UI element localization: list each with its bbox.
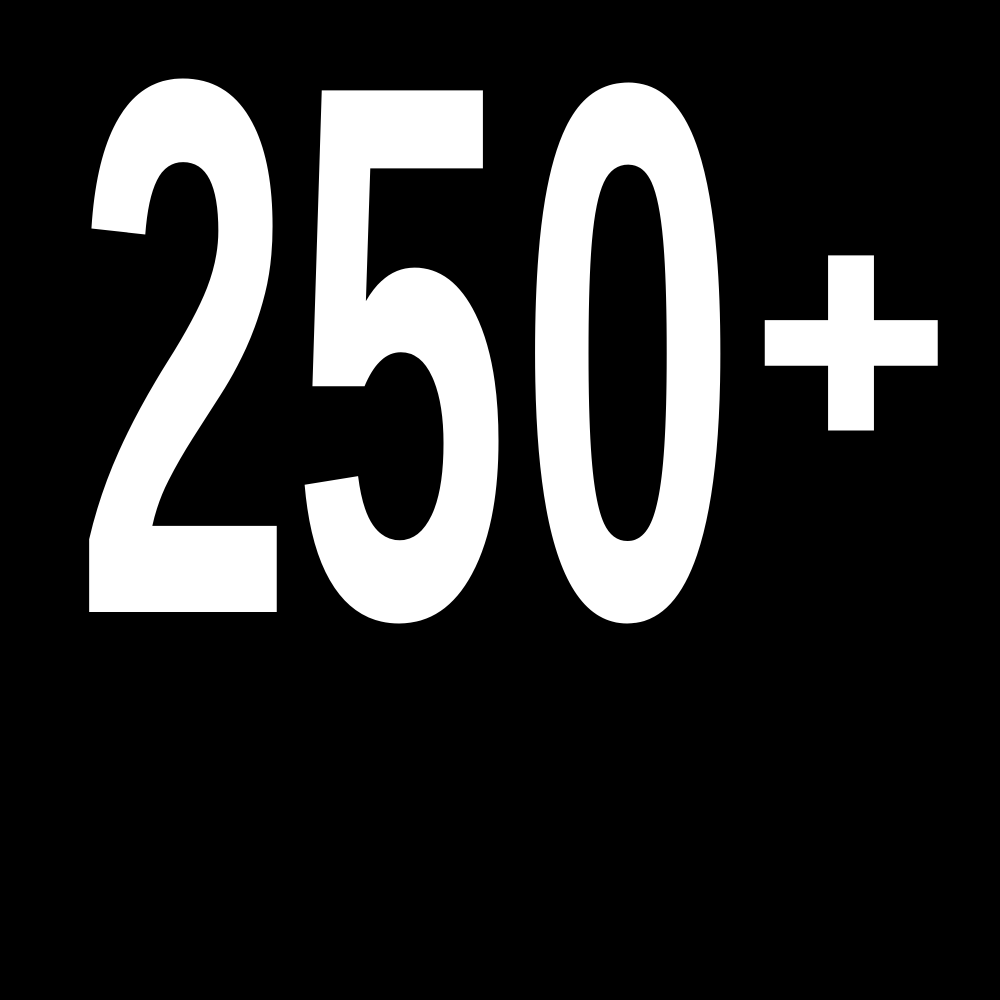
headline number: 250+: [76, 0, 946, 779]
plus sign: +: [756, 157, 946, 520]
